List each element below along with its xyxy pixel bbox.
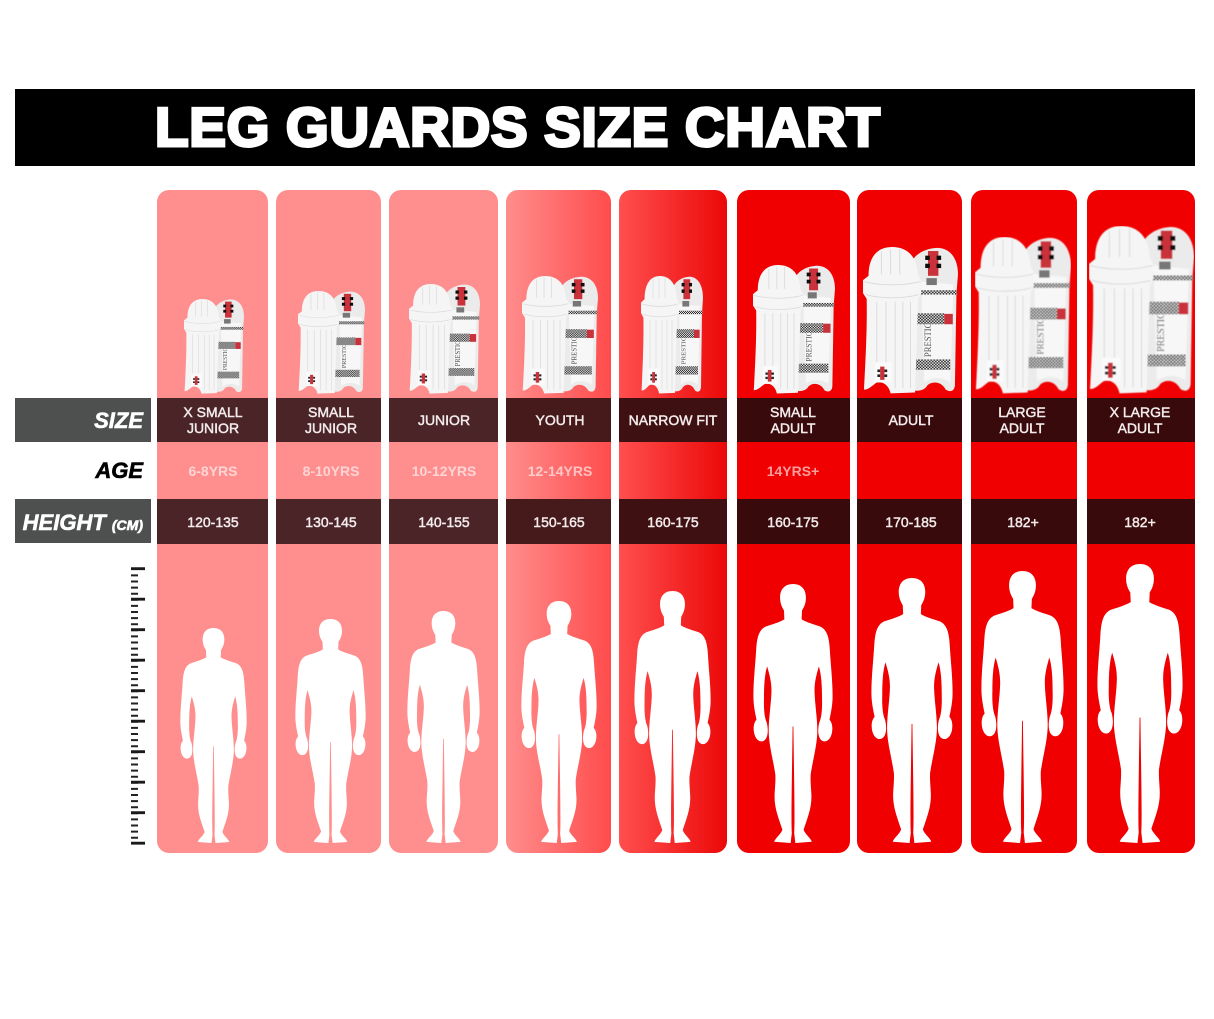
leg guard image: [641, 276, 703, 394]
column: small adult: [737, 190, 850, 853]
height cell: [157, 499, 268, 544]
size cell: [737, 398, 850, 442]
size cell: JUNIOR: [305, 420, 357, 436]
size cell: YOUTH: [536, 412, 584, 428]
title: LEG GUARDS SIZE CHART: [155, 96, 880, 158]
height cell: [737, 499, 850, 544]
height cell: [857, 499, 962, 544]
size cell: ADULT: [889, 412, 934, 428]
column: adult: [857, 190, 962, 853]
column: junior: [389, 190, 498, 853]
row label: height: HEIGHT (CM): [23, 510, 143, 535]
size cell: [276, 398, 381, 442]
height cell: [276, 499, 381, 544]
age value: 12-14YRS: [528, 463, 592, 479]
size cell: SMALL: [308, 404, 354, 420]
leg guard image: [409, 284, 480, 394]
age value: 6-8YRS: [188, 463, 238, 479]
size cell: NARROW FIT: [629, 412, 718, 428]
size cell: X SMALL: [183, 404, 243, 420]
size cell: JUNIOR: [418, 412, 470, 428]
leg guard image: [184, 299, 244, 394]
size cell: [619, 398, 727, 442]
height cell: 150-165: [533, 514, 585, 530]
size cell: JUNIOR: [187, 420, 239, 436]
height cell: [971, 499, 1077, 544]
size cell: [971, 398, 1077, 442]
row label: height: [15, 499, 151, 543]
height cell: 140-155: [418, 514, 470, 530]
height cell: 160-175: [647, 514, 699, 530]
height cell: 170-185: [885, 514, 937, 530]
body silhouette: [871, 578, 953, 843]
title bar: [15, 89, 1195, 166]
column background: [737, 190, 850, 853]
height ruler: [134, 567, 138, 846]
size cell: SMALL: [770, 404, 816, 420]
height cell: [389, 499, 498, 544]
height cell: [506, 499, 611, 544]
row label: age: AGE: [94, 458, 144, 483]
size cell: LARGE: [998, 404, 1046, 420]
size cell: [506, 398, 611, 442]
column background: [619, 190, 727, 853]
body silhouette: [753, 584, 833, 843]
height cell: 160-175: [767, 514, 819, 530]
body silhouette: [295, 619, 366, 843]
height cell: 130-145: [305, 514, 357, 530]
column background: [506, 190, 611, 853]
size cell: ADULT: [1118, 420, 1163, 436]
column: youth: [506, 190, 611, 853]
height cell: 182+: [1007, 514, 1039, 530]
leg guard image: [863, 247, 958, 393]
height cell: 182+: [1124, 514, 1156, 530]
body silhouette: [407, 611, 480, 843]
column: x small junior: [157, 190, 268, 853]
height cell: [1087, 499, 1195, 544]
age value: 8-10YRS: [303, 463, 359, 479]
column: x large adult: [1087, 190, 1195, 853]
body silhouette: [634, 591, 711, 843]
body silhouette: [1097, 564, 1183, 843]
height cell: 120-135: [187, 514, 239, 530]
column background: [971, 190, 1077, 853]
size cell: ADULT: [771, 420, 816, 436]
size cell: [1087, 398, 1195, 442]
column background: [157, 190, 268, 853]
leg guard image: [1089, 226, 1194, 393]
leg guard image: [975, 237, 1071, 393]
size cell: X LARGE: [1110, 404, 1170, 420]
height cell: [619, 499, 727, 544]
size cell: [389, 398, 498, 442]
column background: [857, 190, 962, 853]
size cell: ADULT: [1000, 420, 1045, 436]
column: small junior: [276, 190, 381, 853]
column: narrow fit: [619, 190, 727, 853]
column: large adult: [971, 190, 1077, 853]
body silhouette: [521, 601, 597, 843]
body silhouette: [180, 628, 247, 843]
size cell: [857, 398, 962, 442]
column background: [389, 190, 498, 853]
leg guard image: [753, 265, 835, 393]
age value: 14YRS+: [767, 463, 819, 479]
leg guard image: [522, 276, 598, 394]
age value: 10-12YRS: [412, 463, 476, 479]
body silhouette: [981, 571, 1064, 843]
column background: [1087, 190, 1195, 853]
size cell: [157, 398, 268, 442]
column background: [276, 190, 381, 853]
row label: size: SIZE: [94, 408, 144, 433]
row label: size: [15, 398, 151, 442]
leg guard image: [298, 291, 365, 394]
